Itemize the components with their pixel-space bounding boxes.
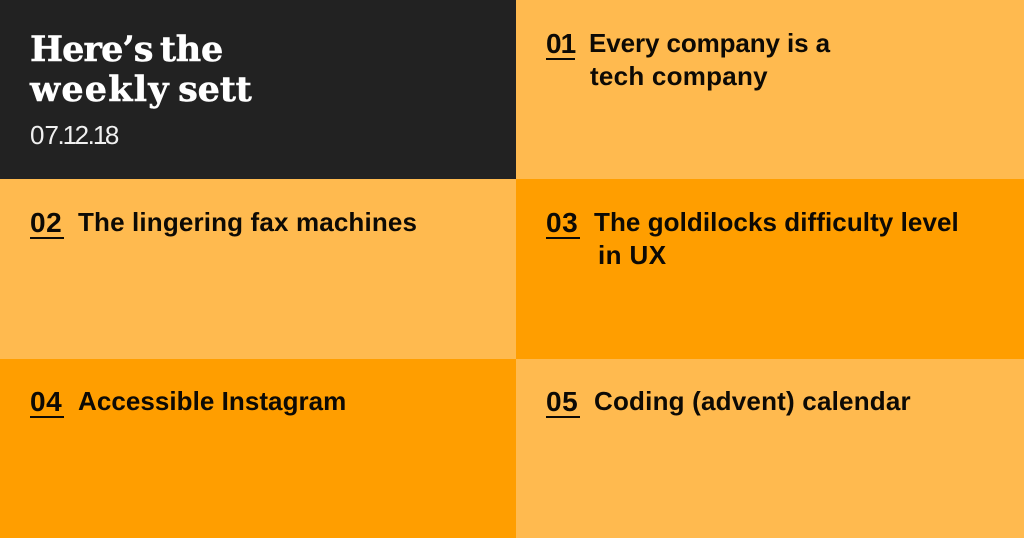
title 03: The goldilocks difficulty level bbox=[594, 207, 959, 237]
panel: header bbox=[0, 0, 516, 179]
panel: item 03 bbox=[516, 179, 1024, 359]
number 04: 04 bbox=[30, 386, 62, 417]
panel: item 04 bbox=[0, 359, 516, 538]
title 03 bbox=[594, 207, 959, 270]
panel: item 05 bbox=[516, 359, 1024, 538]
date: 07.12.18 bbox=[30, 120, 119, 150]
title 04: Accessible Instagram bbox=[78, 386, 346, 416]
number 05: 05 bbox=[546, 386, 578, 417]
title 03: in UX bbox=[598, 240, 666, 270]
heading: Here’s the bbox=[30, 29, 223, 70]
heading: weekly sett bbox=[30, 69, 252, 110]
number 02: 02 bbox=[30, 207, 62, 238]
panel: item 02 bbox=[0, 179, 516, 359]
title 05: Coding (advent) calendar bbox=[594, 386, 911, 416]
title 01: Every company is a bbox=[589, 28, 830, 58]
title 02: The lingering fax machines bbox=[78, 207, 417, 237]
heading bbox=[29, 29, 252, 110]
panel: item 01 bbox=[516, 0, 1024, 179]
title 01 bbox=[589, 28, 830, 91]
title 01: tech company bbox=[590, 61, 768, 91]
number 03: 03 bbox=[546, 207, 578, 238]
number 01: 01 bbox=[546, 28, 575, 59]
